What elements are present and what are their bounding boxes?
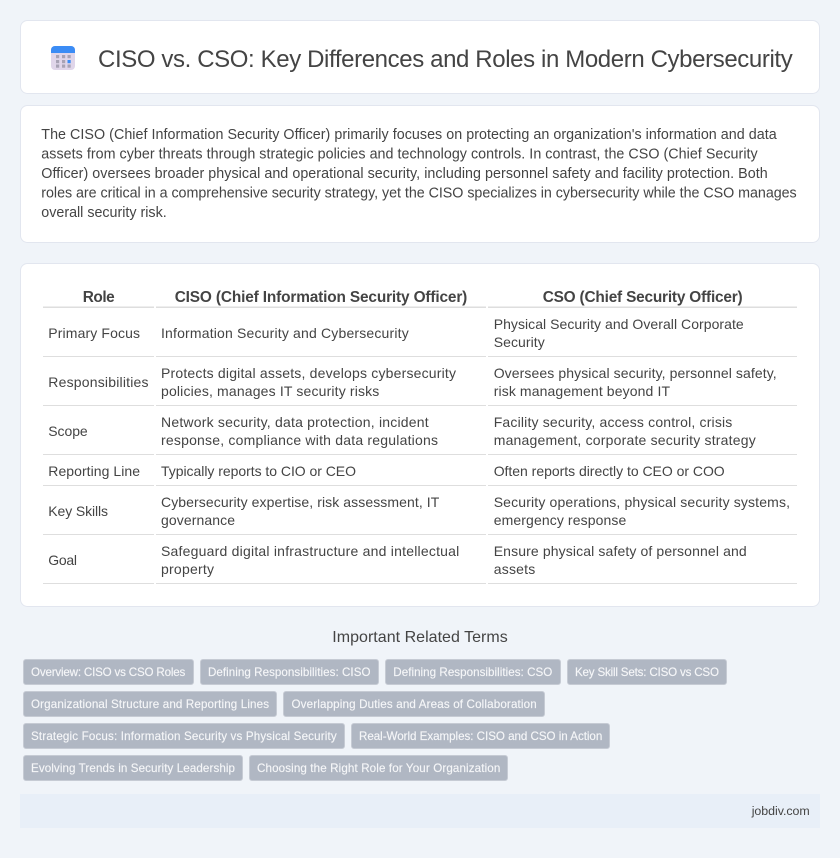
table header row: CISO (Chief Information Security Officer) xyxy=(175,289,467,306)
chip xyxy=(284,692,544,716)
chip xyxy=(250,756,508,780)
chip: Organizational Structure and Reporting Lines xyxy=(31,698,269,711)
chip: Evolving Trends in Security Leadership xyxy=(31,762,235,775)
chip xyxy=(24,756,242,780)
panel: header xyxy=(20,20,820,94)
icon: calendar xyxy=(51,46,75,70)
table row: goal: Ensure physical safety of personnel and xyxy=(494,543,747,559)
chip xyxy=(24,724,344,748)
table row: key skills xyxy=(43,494,797,535)
table row: scope: Network security, data protection, incident xyxy=(161,414,429,430)
table row: primary focus: Physical Security and Overall Corporate xyxy=(494,316,744,332)
table row: scope: Facility security, access control, crisis xyxy=(494,414,732,430)
chip: Strategic Focus: Information Security vs Physical Security xyxy=(31,730,337,743)
chip xyxy=(352,724,610,748)
table header row: CSO (Chief Security Officer) xyxy=(543,289,743,306)
chip: Defining Responsibilities: CSO xyxy=(393,666,552,679)
table row: key skills: Security operations, physical security systems, xyxy=(494,494,790,510)
panel: introduction text: assets from cyber threats through strategic policies and technology controls. In contrast, the CSO (Chief Security xyxy=(41,146,759,162)
table header row: Role xyxy=(83,289,115,306)
table row: goal xyxy=(43,543,797,584)
chip: Key Skill Sets: CISO vs CSO xyxy=(575,666,719,679)
table row: primary focus: Information Security and Cybersecurity xyxy=(161,325,409,341)
footer: jobdiv.com xyxy=(751,804,810,818)
chip: Overview: CISO vs CSO Roles xyxy=(31,666,186,679)
table row: goal: assets xyxy=(494,561,535,577)
table header row xyxy=(43,289,797,308)
table row: responsibilities: Oversees physical security, personnel safety, xyxy=(494,365,777,381)
panel: introduction text: Officer) oversees broader physical and operational security, including personnel safety and facility protection. Both xyxy=(41,166,768,182)
table row: scope xyxy=(43,414,797,455)
panel: introduction text: overall security risk. xyxy=(41,205,167,221)
chip xyxy=(24,692,276,716)
table row: responsibilities: risk management beyond IT xyxy=(494,383,670,399)
panel: introduction text: The CISO (Chief Information Security Officer) primarily focuses on protecting an organization's information and data xyxy=(41,127,777,143)
table row: scope: response, compliance with data regulations xyxy=(161,432,438,448)
chip: Defining Responsibilities: CISO xyxy=(208,666,370,679)
chip xyxy=(568,660,726,684)
chip xyxy=(386,660,560,684)
table row: goal: Goal xyxy=(48,552,77,568)
table row: scope: Scope xyxy=(48,423,88,439)
table row: key skills: emergency response xyxy=(494,512,627,528)
chip: Choosing the Right Role for Your Organization xyxy=(257,762,500,775)
table row: key skills: governance xyxy=(161,512,235,528)
table row: responsibilities xyxy=(43,365,797,406)
table row: reporting line: Reporting Line xyxy=(48,463,140,479)
chip: Overlapping Duties and Areas of Collaboration xyxy=(292,698,537,711)
panel: introduction text: roles are critical in a comprehensive security strategy, yet the CISO specializes in cybersecurity while the CSO manages xyxy=(41,186,797,202)
title: CISO vs. CSO: Key Differences and Roles in Modern Cybersecurity xyxy=(98,46,793,73)
table row: key skills: Key Skills xyxy=(48,503,108,519)
panel: comparison table xyxy=(20,264,820,606)
chip xyxy=(200,660,378,684)
table row: scope: management, corporate security strategy xyxy=(494,432,756,448)
related terms chips xyxy=(24,660,726,780)
table row: primary focus: Security xyxy=(494,334,545,350)
table row: goal: property xyxy=(161,561,214,577)
table row: reporting line: Typically reports to CIO or CEO xyxy=(161,463,356,479)
chip xyxy=(24,660,194,684)
heading: important related terms: Important Related Terms xyxy=(332,629,508,646)
table row: responsibilities: Responsibilities xyxy=(48,374,148,390)
table row: primary focus xyxy=(43,316,797,357)
table row: goal: Safeguard digital infrastructure and intellectual xyxy=(161,543,459,559)
footer xyxy=(20,794,820,828)
panel: introduction text xyxy=(20,106,820,242)
chip: Real-World Examples: CISO and CSO in Action xyxy=(359,730,602,743)
table row: primary focus: Primary Focus xyxy=(48,325,140,341)
table row: responsibilities: policies, manages IT security risks xyxy=(161,383,379,399)
table row: reporting line xyxy=(43,463,797,486)
table row: key skills: Cybersecurity expertise, risk assessment, IT xyxy=(161,494,440,510)
table row: reporting line: Often reports directly to CEO or COO xyxy=(494,463,725,479)
table row: responsibilities: Protects digital assets, develops cybersecurity xyxy=(161,365,456,381)
